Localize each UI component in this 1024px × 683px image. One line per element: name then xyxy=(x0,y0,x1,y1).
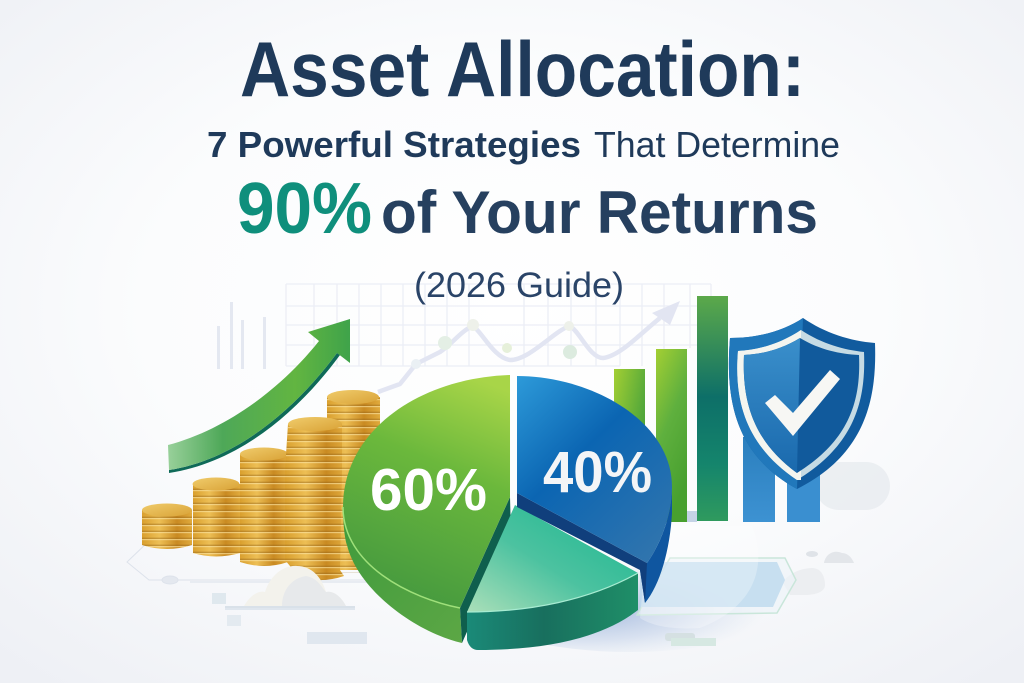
coin stack 2 xyxy=(192,478,240,556)
pie slice: 60% green xyxy=(343,375,511,643)
pie slice: teal xyxy=(467,505,638,650)
label: 40%: 40% xyxy=(543,440,652,505)
blue bar 2 xyxy=(787,470,820,522)
coin stack 5 xyxy=(327,390,380,573)
year note: 2026 Guide: (2026 Guide) xyxy=(414,266,624,305)
shield body xyxy=(729,318,875,489)
floor decoration: left hexagon platform xyxy=(127,541,420,644)
check mark xyxy=(765,370,840,436)
coin stack 3 xyxy=(240,448,288,566)
floor shadow below bars xyxy=(687,511,697,522)
right clouds xyxy=(783,462,890,595)
shield with check icon xyxy=(729,318,875,489)
bar 2 xyxy=(656,349,687,522)
faint line chart with arrow xyxy=(378,301,680,392)
lower right platform xyxy=(480,526,796,652)
label: 60%: 60% xyxy=(370,457,487,523)
title: Asset Allocation: Asset Allocation: xyxy=(240,25,805,113)
green growth arrow xyxy=(168,319,350,473)
subtitle: 7 Powerful Strategies That Determine: 7 Powerful Strategies xyxy=(207,124,581,165)
background green and teal bars xyxy=(614,296,820,522)
small cream cloud xyxy=(225,566,355,608)
gold coin stacks xyxy=(142,390,380,580)
pie chart xyxy=(343,375,672,650)
subtitle: 7 Powerful Strategies That Determine: That Determine xyxy=(594,124,840,165)
headline: 90% of Your Returns: of Your Returns xyxy=(381,179,818,246)
faint background grid chart xyxy=(286,284,711,366)
coin stack 1 xyxy=(142,504,192,549)
headline: 90% of Your Returns: 90% xyxy=(237,169,372,249)
faint left bars xyxy=(217,302,266,369)
coin stack 4 xyxy=(285,417,344,580)
pie slice: 40% blue xyxy=(517,376,672,603)
bar 1 xyxy=(614,369,645,522)
blue bar 1 xyxy=(743,437,775,522)
bar 3 xyxy=(697,296,728,521)
